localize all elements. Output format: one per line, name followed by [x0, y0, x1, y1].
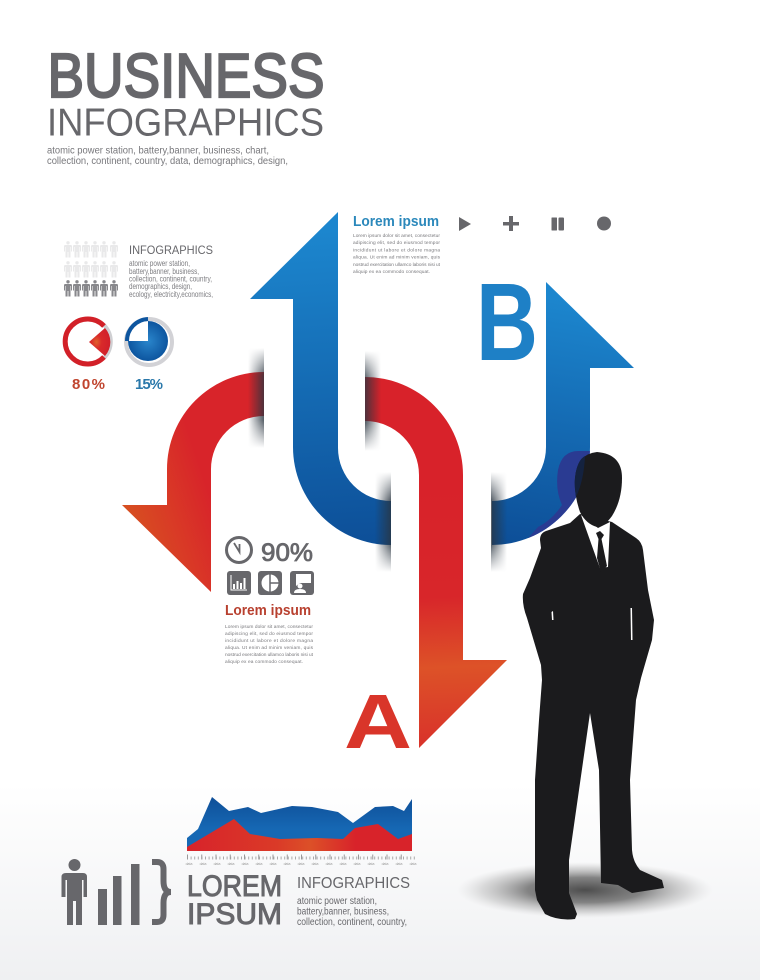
text block: lorem ipsum blue: Lorem ipsum [353, 214, 439, 230]
text block: lorem ipsum blue: adipiscing elit, sed do eiusmod tempor [353, 240, 440, 246]
text block: lorem ipsum blue: aliqua. Ut enim ad minim veniam, quis [353, 255, 441, 261]
text block: infographics bottom: INFOGRAPHICS [297, 875, 410, 892]
text block: lorem ipsum red: nostrud exercitation ullamco laboris nisi ut [225, 652, 314, 658]
blue area [187, 797, 412, 851]
chart axis: data [284, 862, 290, 866]
title description: atomic power station, battery,banner, business, chart, [47, 146, 269, 156]
icon: brace [152, 862, 171, 922]
chart axis: data [382, 862, 388, 866]
chart axis: data [214, 862, 220, 866]
floor shadow [457, 862, 713, 918]
chart axis: data [256, 862, 262, 866]
text block: infographics left: INFOGRAPHICS [129, 243, 213, 257]
red area [187, 819, 412, 851]
heading: lorem ipsum [187, 870, 282, 931]
icon: standing person [62, 859, 87, 925]
text block: lorem ipsum red: incididunt ut labore et dolore magna [225, 638, 313, 644]
title description [47, 146, 288, 167]
clock and 90% stat [226, 538, 313, 567]
percent labels: 15% [135, 376, 163, 393]
chart axis: data [326, 862, 332, 866]
pocket highlights [552, 611, 554, 620]
chart axis: data [298, 862, 304, 866]
text block: infographics left [129, 243, 213, 299]
text block: lorem ipsum red: aliquip ex ea commodo consequat. [225, 659, 303, 665]
chart axis: data [396, 862, 402, 866]
arrow: red left [122, 372, 264, 592]
media icons [459, 216, 611, 231]
heading: infographics: INFOGRAPHICS [47, 102, 324, 144]
icon: record [597, 216, 611, 230]
chart axis: data [242, 862, 248, 866]
title description: collection, continent, country, data, demographics, design, [47, 156, 288, 167]
icon row [227, 571, 314, 595]
arrow: blue left [250, 212, 391, 545]
chart axis: data [354, 862, 360, 866]
head overlap tint [575, 456, 585, 497]
heading: lorem ipsum: IPSUM [187, 898, 282, 931]
text block: lorem ipsum blue: incididunt ut labore et dolore magna [353, 247, 440, 253]
text block: lorem ipsum blue: nostrud exercitation ullamco laboris nisi ut [353, 262, 441, 268]
shirt [581, 515, 610, 568]
businessman silhouette [523, 452, 664, 919]
percent labels: 80% [72, 376, 105, 393]
text block: lorem ipsum red: Lorem ipsum dolor sit amet, consectetur [225, 624, 313, 630]
chart axis: data [270, 862, 276, 866]
text block: lorem ipsum red: adipiscing elit, sed do eiusmod tempor [225, 631, 313, 637]
text block: lorem ipsum red: aliqua. Ut enim ad minim veniam, quis [225, 645, 314, 651]
text block: lorem ipsum blue: aliquip ex ea commodo consequat. [353, 269, 430, 275]
heading: business: BUSINESS [48, 42, 324, 111]
title [47, 42, 324, 144]
chart axis: data [228, 862, 234, 866]
head [575, 452, 622, 527]
arrow: blue B [492, 282, 634, 545]
chart axis: data [312, 862, 318, 866]
icon: presenter [290, 571, 314, 595]
donut chart: 80% [65, 319, 111, 364]
pictogram: people rows [64, 241, 118, 296]
text block: infographics left: battery,banner, business, [129, 267, 199, 276]
text block: infographics bottom: battery,banner, business, [297, 906, 389, 918]
area chart [186, 797, 416, 866]
text block: lorem ipsum red [225, 603, 314, 665]
chart axis: data [200, 862, 206, 866]
text block: infographics left: atomic power station, [129, 259, 190, 268]
text block: infographics bottom: atomic power station, [297, 896, 377, 907]
text block: lorem ipsum blue [353, 214, 441, 275]
text block: infographics left: collection, continent, country, [129, 274, 212, 284]
chart axis: data [340, 862, 346, 866]
body [523, 514, 664, 919]
icon: play [459, 217, 471, 231]
arrow: red A [365, 377, 507, 748]
chart axis: data [186, 862, 192, 866]
text block: infographics bottom [297, 875, 410, 928]
chart axis [186, 857, 416, 866]
tie [596, 531, 607, 572]
heading: lorem ipsum: LOREM [187, 870, 282, 903]
percent labels [72, 376, 163, 393]
arrow fold shadows [248, 348, 507, 572]
icon: bar chart [227, 571, 251, 595]
icon: pie [258, 571, 282, 595]
text block: lorem ipsum blue: Lorem ipsum dolor sit amet, consectetur [353, 233, 440, 239]
chart axis: data [410, 862, 416, 866]
icon: pause [552, 218, 564, 230]
text block: lorem ipsum red: Lorem ipsum [225, 603, 311, 619]
letter A: A [344, 679, 412, 765]
icon: bars [98, 864, 140, 925]
text block: infographics left: demographics, design, [129, 282, 192, 291]
overlap shadow on blue arrow [528, 451, 590, 538]
letter B: B [476, 261, 538, 384]
donut chart: 15% [126, 319, 172, 365]
text block: infographics bottom: collection, continent, country, [297, 917, 407, 928]
clock and 90% stat: 90% [261, 539, 313, 567]
chart axis: data [368, 862, 374, 866]
icon: plus [503, 216, 519, 231]
text block: infographics left: ecology, electricity,economics, [129, 290, 213, 299]
